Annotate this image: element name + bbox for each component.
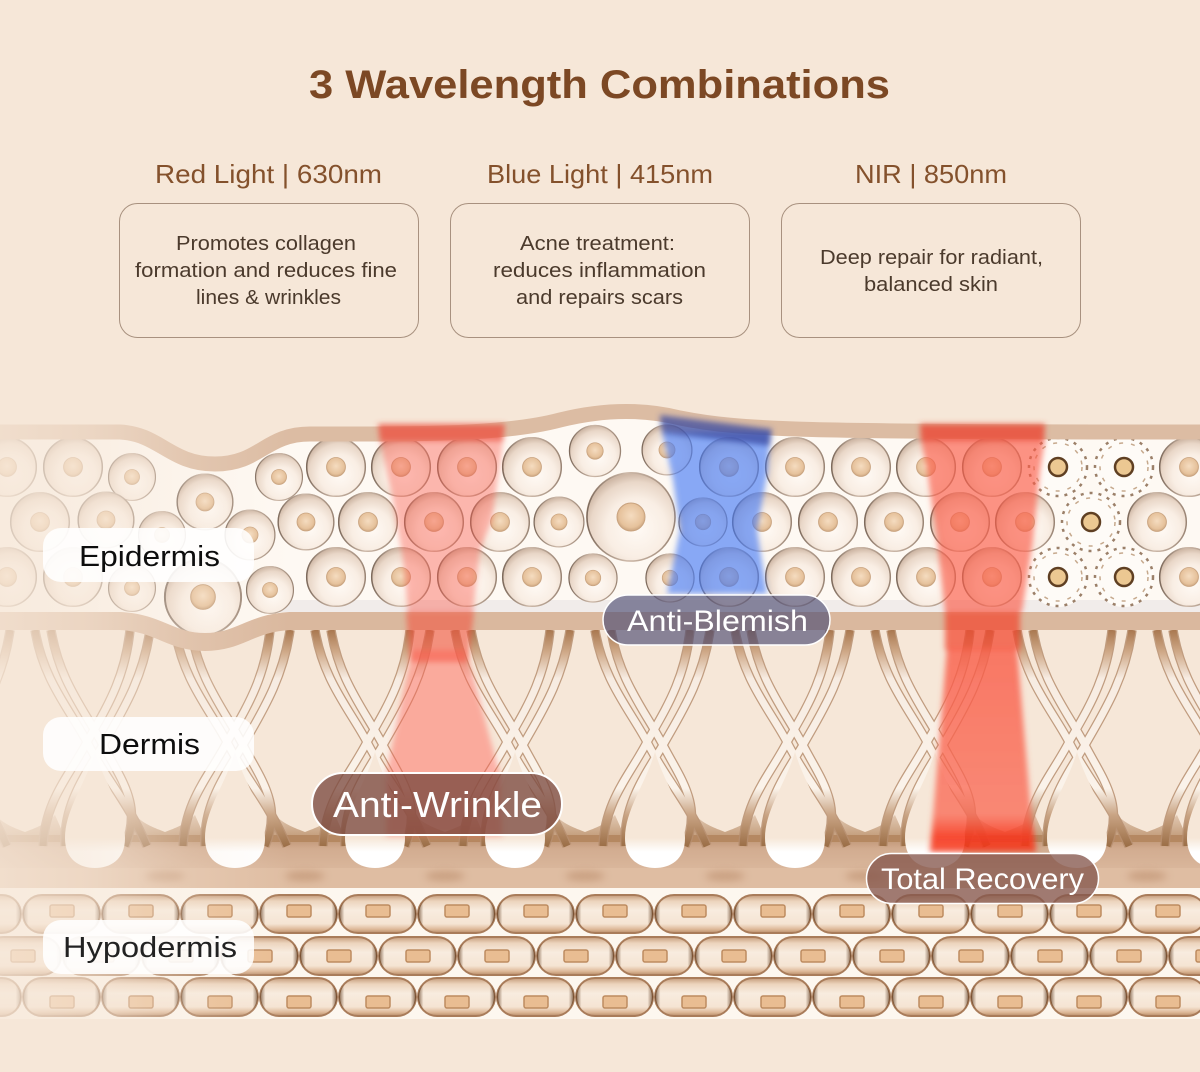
card: blue light description xyxy=(450,204,750,338)
card: NIR description: balanced skin xyxy=(864,274,998,296)
callout: Anti-Wrinkle: Anti-Wrinkle xyxy=(333,784,542,825)
card: blue light description: and repairs scars xyxy=(516,287,683,309)
left fade overlay xyxy=(0,420,290,1020)
card: red light description xyxy=(120,204,418,338)
dermis lattice xyxy=(0,630,1200,870)
title: 3 Wavelength Combinations xyxy=(309,63,890,107)
skin cross-section diagram xyxy=(0,411,1200,1020)
label: Epidermis xyxy=(43,528,254,582)
callout: Anti-Blemish: Anti-Blemish xyxy=(627,605,808,638)
card: NIR description xyxy=(782,204,1080,338)
card: red light description: formation and reduces fine xyxy=(135,260,397,282)
card: NIR description: Deep repair for radiant, xyxy=(820,247,1043,269)
callout: Anti-Wrinkle xyxy=(312,773,562,835)
heading: blue light: Blue Light | 415nm xyxy=(487,159,713,189)
top membrane xyxy=(0,411,1200,464)
beam: blue anti-blemish xyxy=(660,415,772,594)
card: red light description: lines & wrinkles xyxy=(196,287,341,309)
heading: red light: Red Light | 630nm xyxy=(155,159,382,189)
epidermis cells xyxy=(0,424,1200,636)
card: blue light description: reduces inflammation xyxy=(493,260,706,282)
basement membrane xyxy=(0,620,1200,642)
callout: Total Recovery xyxy=(866,854,1098,904)
dermis lower band xyxy=(0,868,1200,888)
panel: blue light xyxy=(450,159,750,338)
panel: NIR xyxy=(782,159,1080,338)
card: blue light description: Acne treatment: xyxy=(520,233,675,255)
label: Hypodermis: Hypodermis xyxy=(63,932,237,964)
hypodermis capsule rows xyxy=(0,888,1200,1019)
epidermis interior xyxy=(0,413,1200,638)
callout: Anti-Blemish xyxy=(603,595,830,645)
label: Dermis: Dermis xyxy=(99,729,200,761)
callout: Total Recovery: Total Recovery xyxy=(881,863,1084,896)
large cell xyxy=(586,472,676,562)
card: red light description: Promotes collagen xyxy=(176,233,356,255)
label: Dermis xyxy=(43,717,254,771)
heading: NIR: NIR | 850nm xyxy=(855,159,1007,189)
label: Hypodermis xyxy=(43,920,254,974)
label: Epidermis: Epidermis xyxy=(79,541,220,573)
beam: NIR total recovery xyxy=(920,424,1045,852)
epidermis soft highlight xyxy=(280,600,1200,612)
panel: red light xyxy=(120,159,418,338)
repaired sparkling cells xyxy=(1028,437,1154,607)
beam: red anti-wrinkle xyxy=(378,424,505,836)
